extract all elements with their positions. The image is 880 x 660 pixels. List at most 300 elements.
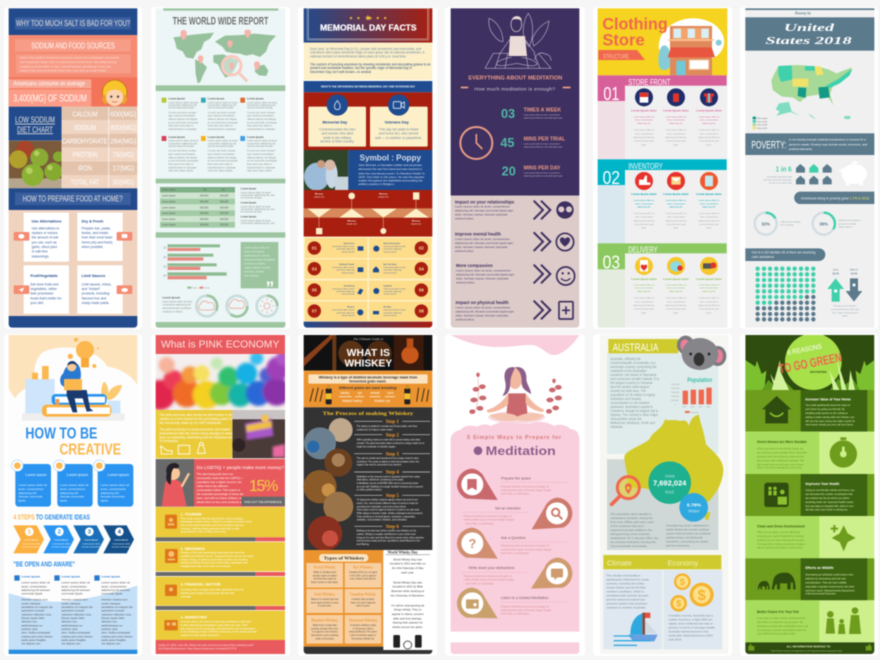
section: sodium and food sources: sodium than recommended before they ever pick up a salt shaker. <box>20 69 107 73</box>
delivery text: Lorem ipsum dolor sit <box>634 297 655 300</box>
panel: how to be creative <box>9 335 137 654</box>
grid: eight facts: 05 <box>312 288 317 293</box>
types of whiskey: contains at least 51% corn. <box>311 627 339 630</box>
data table: Lorem Ipsum <box>162 200 176 203</box>
grid: eight facts: Submit Information <box>383 242 400 245</box>
section: weddings: Another of the pink-generating industries has been the <box>181 551 245 555</box>
columns of text: amet, consectetuer <box>101 584 127 588</box>
section: financial sector <box>156 577 285 606</box>
world whisky day card: the third Saturday of May <box>392 566 424 570</box>
section: symbol poppy <box>348 150 432 190</box>
grid: eight facts: Respect <box>347 306 355 309</box>
section: food preparation tips: garlic, citrus juice <box>32 245 57 249</box>
inventory text: adipiscing elit. Aenean <box>698 219 721 222</box>
timeline: Memory <box>379 193 388 195</box>
grid: eight facts: consectetur adipiscing <box>336 311 354 314</box>
panel: clothing store <box>598 8 727 328</box>
section: symbol poppy: witnessed the war first hand and was inspired to <box>358 167 422 171</box>
arrows: up and down stats: Poverty rate for females <box>834 305 856 308</box>
inventory text: amet, consectetuer <box>635 202 653 205</box>
section: food preparation tips: vegetables, rather <box>30 287 58 291</box>
section 2 <box>745 432 874 474</box>
header: ★★ ★★★ <box>349 16 388 21</box>
world whisky day card: founded in 2012 and falls on <box>390 562 426 566</box>
section: tourism <box>156 507 285 537</box>
delivery text: adipiscing elit. Aenean <box>665 304 688 307</box>
data table: 000,000 <box>220 196 229 198</box>
intro text: country by total area. The <box>610 389 646 393</box>
top strip: Poverty In <box>795 12 811 16</box>
icon: child face <box>102 80 127 106</box>
data table: Lorem Ipsum <box>162 224 176 227</box>
store front text <box>631 108 723 146</box>
arrows: four steps: Lorem Ipsum <box>115 540 128 542</box>
impact items text: adipiscing elit. Aenean commodo ligula eget <box>456 272 514 276</box>
grid: eight facts: consectetur adipiscing <box>383 290 401 293</box>
six text items: consectetur adipiscing elit <box>247 142 276 145</box>
columns of text: nascetur ridiculus mus. <box>101 612 132 616</box>
delivery text: Lorem ipsum dolor sit <box>666 297 687 300</box>
table notes: consectetur adipiscing elit, sed <box>241 194 275 197</box>
table: diet chart: 75(MG) <box>112 150 135 159</box>
table notes: Lorem Ipsum <box>241 215 257 218</box>
columns of text: sem. Nulla consequat <box>61 631 90 635</box>
section 5: especially in aquatic environments and more <box>805 585 855 588</box>
steps: combined. The yeast is added to start fermentation when the <box>357 460 420 463</box>
section: food preparation tips: beans, and meats <box>82 231 108 235</box>
quote box <box>241 242 278 297</box>
intro text: December Day, isn't well known—is unclear. <box>310 70 372 74</box>
types of whiskey: Irish Whiskey <box>314 592 335 596</box>
climate box: correlated with periodic drought, <box>606 593 649 597</box>
world whisky day card <box>383 550 432 650</box>
section 2: also means that you will save more money <box>757 463 805 466</box>
columns of text: commodo ligula <box>101 592 123 596</box>
icons: delivery <box>635 257 718 275</box>
six text items: reprehenderit in voluptate <box>208 128 236 131</box>
section 1: your home by going eco-friendly. By <box>805 408 846 411</box>
orange intro: Different grains are used including: <box>339 386 397 390</box>
table: diet chart: PROTEIN <box>73 150 97 159</box>
types of whiskey <box>304 550 383 647</box>
header jungle <box>745 333 874 390</box>
table notes <box>241 187 275 225</box>
timeline: Memory <box>348 221 357 223</box>
yellow intro section: The pink economy is a socio-economic and market <box>159 428 231 432</box>
columns of text: pellentesque eu <box>61 623 83 627</box>
climate box: The climate of Australia is <box>606 573 641 577</box>
inventory text: Lorem ipsum dolor sit <box>699 212 720 215</box>
donut labels: 32% <box>761 221 770 226</box>
impact items text: Impact on your relationships <box>455 200 515 205</box>
stats: MINS PER TRIAL <box>524 136 565 142</box>
grid: eight facts: Lorem ipsum dolor sit amet <box>383 245 406 248</box>
orange intro <box>304 371 432 407</box>
top strip <box>745 8 874 16</box>
inventory text: dolor. <box>706 227 712 230</box>
arrows: four steps: sit amet consectetur <box>22 545 41 548</box>
columns of text: vel aliquet nec. <box>21 642 41 646</box>
stats <box>500 107 565 178</box>
arrows: four steps: Lorem ipsum dolor <box>52 542 71 545</box>
section: symbol poppy: 1915. One letter to the poem. He saw the poppies <box>358 175 425 179</box>
red question block: FIND OUT THE DIFFERENCE <box>244 500 282 504</box>
six text items: Lorem ipsum dolor sit amet <box>247 101 277 104</box>
economy box: world after Switzerland from 2013 <box>668 634 713 638</box>
quote box: adipiscing elit, sed do <box>244 253 270 257</box>
grid: eight facts: Hot Page <box>383 306 391 309</box>
arrows: four steps: 1 <box>28 530 31 536</box>
title: AUSTRALIA <box>613 342 659 354</box>
map legend: 16% or higher <box>757 118 768 120</box>
meditation steps text: Listen to a Guided Meditation <box>501 596 549 600</box>
timeline: simple text <box>347 223 357 226</box>
store front text: Lorem ipsum dolor sit <box>634 115 655 118</box>
figure body <box>509 16 527 56</box>
section 5: of Environmental Protection. <box>805 593 837 596</box>
impact items text: adipiscing elit. Aenean commodo ligula eget <box>456 309 514 313</box>
population chart: 5,000,000 <box>671 400 678 402</box>
economy box <box>663 570 722 649</box>
columns of text: ultricies nec <box>61 620 78 624</box>
impact items text: Lorem ipsum dolor sit amet, consectetuer <box>455 204 510 208</box>
world whisky day card: talks and host tastings, <box>393 616 422 620</box>
quote box: quis nostrud. <box>244 273 259 277</box>
steps: to refine purified mixture. <box>357 489 383 492</box>
world whisky day card: the University of Aberdeen. <box>391 593 425 597</box>
six text items: consectetur adipiscing elit <box>247 104 276 107</box>
background <box>156 8 285 328</box>
section 01: store front: STORE FRONT <box>628 77 671 87</box>
columns of text: ultricies nec <box>21 620 38 624</box>
header: MEMORIAL DAY FACTS <box>320 23 417 33</box>
cards: three tips: Lorem ipsum dolor sit <box>101 483 129 487</box>
store front text: commodo ligula eget <box>666 140 686 143</box>
types of whiskey: new, charred oak barrels. <box>350 578 376 581</box>
header: WHISKEY <box>344 359 393 370</box>
six text items: Lorem ipsum dolor sit amet <box>168 140 199 143</box>
inventory text: adipiscing elit. <box>637 206 651 209</box>
impact items text: dolor. Aenean massa. Aenean vulputate <box>456 276 509 280</box>
columns of text: amet, consectetuer <box>61 584 87 588</box>
red question block: the important percentage of those dis <box>197 492 244 496</box>
table notes: Lorem ipsum dolor sit amet <box>241 205 271 208</box>
delivery text: Lorem ipsum dolor sit <box>634 283 655 286</box>
header: why too much salt <box>9 8 137 35</box>
six text items: Duis aute irure dolor in <box>247 125 273 128</box>
six text items: Lorem ipsum dolor sit amet <box>168 101 199 104</box>
columns of text: Donec quam felis <box>21 616 45 620</box>
title: Store <box>602 30 645 49</box>
panel: prepare for meditation <box>451 335 579 654</box>
divider band <box>156 85 285 91</box>
title bar <box>156 335 285 354</box>
cards: three tips: Lorem Ipsum <box>108 473 129 477</box>
illustration: books <box>42 394 111 417</box>
section: marketing: support for their public statement. <box>181 633 220 637</box>
top wave <box>451 335 579 355</box>
section: weddings: wedding and fashion sector. Legal protection across the world <box>181 554 254 558</box>
delivery text: Lorem Ipsum dolor <box>696 277 723 281</box>
section 1: Increase Value of Your Home <box>805 398 851 402</box>
climate box: cyclones in northern Australia. <box>606 605 646 609</box>
climate box: and the seasonal tropical low- <box>606 597 646 601</box>
section 3: breathing better air. Improved health means <box>805 501 854 504</box>
columns of text: pede justo fringilla <box>61 638 86 642</box>
store front text: Lorem Ipsum dolor <box>663 108 690 112</box>
columns of text: pellentesque eu <box>21 623 43 627</box>
inventory text: dolor. <box>673 227 679 230</box>
section: weddings: made a range of options accessible to same-sex couples, <box>181 557 249 561</box>
meditation steps text: Praesent tincidunt sit amet leo at feugiat. Ut <box>464 515 512 518</box>
donut labels: poverty are mostly <box>838 222 857 225</box>
six text items: Ut enim ad minim veniam <box>208 111 236 114</box>
columns of text: ultricies nec <box>101 620 118 624</box>
steps: The wort is cooled and transferred into a large vessel is also <box>357 457 419 460</box>
delivery text: adipiscing elit. <box>637 290 651 293</box>
title: CREATIVE <box>59 442 121 459</box>
grid: eight facts: 08 <box>419 309 424 314</box>
table notes: Lorem ipsum dolor sit amet <box>241 191 271 194</box>
delivery text: amet, consectetuer <box>667 300 685 303</box>
cards: three tips: Lorem ipsum dolor sit <box>60 483 89 487</box>
economy box: capita, and a relatively low rate of <box>668 622 713 626</box>
section: marketing: in their advertising campaigns using same-sex ads. Their <box>181 623 248 627</box>
steps: being as it's color and then filtered to remove them often particles <box>357 536 425 539</box>
impact items text: dolor. Aenean massa. Aenean vulputate <box>455 245 508 249</box>
panel: go green <box>745 333 874 654</box>
illustration: desk items <box>22 366 124 421</box>
store front text: dolor. <box>673 143 679 146</box>
arrows: up and down stats: down to <box>850 268 859 271</box>
table notes: consectetur adipiscing elit, sed <box>241 208 275 211</box>
steps: spending the maturation, and some times blend. <box>357 505 407 508</box>
meditation steps text: mattis porttitor quam vel luctus integer feugiat <box>501 489 551 492</box>
subheading: How much meditation is enough? <box>474 86 555 92</box>
six text items: Ut enim ad minim veniam <box>168 150 196 153</box>
section 4: way for greener and cleaner environment. <box>757 546 803 549</box>
section 2: items longer than traditional materials. This <box>757 459 805 462</box>
inventory text: adipiscing elit. <box>669 206 683 209</box>
intro text: concentrated on the eastern <box>610 401 650 405</box>
section: food preparation tips: seasonings. <box>32 254 50 258</box>
types of whiskey: least 3 years. <box>356 605 370 608</box>
lower text: self-governing crown colonies <box>610 532 650 536</box>
six text items: consectetur adipiscing elit <box>208 142 236 145</box>
grid: eight facts: Lorem ipsum dolor sit amet <box>332 287 355 290</box>
data table: 000,000 <box>200 196 209 198</box>
arrows: up and down stats: increased between 2010 and <box>831 308 860 311</box>
section: symbol poppy: John McCrae, a Canadian soldier and physician, <box>358 163 423 167</box>
impact items text: Lorem ipsum dolor sit amet, consectetuer <box>456 305 510 309</box>
grid: eight facts: consectetur adipiscing <box>383 248 401 251</box>
process photos <box>303 418 353 551</box>
grid: eight facts: sed do eiusmod <box>341 272 354 274</box>
photo: rainbow smoke <box>154 353 286 411</box>
bar chart: Q4 <box>163 276 167 278</box>
meditation steps text: lorem felis, ut scelerisque. <box>501 613 530 616</box>
intro text: Each year, on Memorial Day (U.S.), people visit cemeteries and memorials, and <box>310 47 421 51</box>
section: symbol poppy: write the now-famous poem "In Flanders Fields" in <box>358 171 425 175</box>
columns of text: pretium quis <box>61 627 78 631</box>
lower section <box>451 196 579 328</box>
upper info box <box>607 353 718 454</box>
donut text: eiusmod tempor incididunt <box>162 307 192 310</box>
pin 2: set an intention <box>532 498 572 529</box>
dark process section <box>304 407 432 550</box>
arrows: four steps: sit amet consectetur <box>52 545 71 548</box>
delivery text: amet, consectetuer <box>700 287 718 290</box>
section 5: Efforts on Wildlife <box>805 566 834 570</box>
section: weddings: 2. WEDDINGS <box>181 547 205 551</box>
table: diet chart: IRON <box>78 164 92 173</box>
table: diet chart: CARBOHYDRATE <box>62 136 107 145</box>
arrows: four steps: 2 <box>58 530 61 536</box>
six text items: Lorem Ipsum <box>168 135 186 139</box>
section: food preparation tips: Use alternatives to <box>32 226 59 230</box>
red question block: allows them to buy more products and <box>197 500 245 504</box>
grid: eight facts: consectetur adipiscing <box>383 311 401 314</box>
six text items: consectetur adipiscing elit <box>168 104 197 107</box>
store front text: amet, consectetuer <box>635 132 653 135</box>
cards: three tips: Aenean commodo <box>18 495 43 499</box>
heading <box>467 435 562 458</box>
grid: eight facts: consectetur adipiscing <box>336 248 354 251</box>
grid: eight facts: Anchor Item <box>344 242 355 245</box>
stats: Lorem ipsum dolor sit amet, consectetuer <box>524 114 560 117</box>
population chart: 20,000,000 <box>671 388 679 390</box>
six text items: Lorem Ipsum <box>208 97 225 101</box>
cards: three tips: amet, consectetuer <box>101 487 126 491</box>
six text items: sed do eiusmod tempor <box>168 145 194 148</box>
meditation steps text: lorem felis, ut scelerisque. <box>466 522 495 525</box>
data table: Lorem Ipsum <box>162 206 176 209</box>
section 2: when it comes to maintaining your home. <box>757 467 802 470</box>
section: food preparation tips: than processed <box>30 292 53 296</box>
data table: 000,000 <box>200 201 209 203</box>
types of whiskey: Contains 51% rye, an aged <box>349 571 378 574</box>
section 6: If you want to make a better environment for <box>757 617 806 620</box>
red question block: population has a higher income, but <box>197 480 242 484</box>
intro text: and numerous smaller islands. It is <box>610 377 659 381</box>
orange intro: Malted barley <box>342 399 363 403</box>
stats: 03 <box>501 107 515 121</box>
world whisky day card: each year. <box>401 570 414 574</box>
header: The Ultimate Guide to <box>353 337 384 341</box>
stat: 3,400 mg of sodium <box>9 77 137 107</box>
orange intro: fermented grain mash. <box>349 379 387 383</box>
six text items: ullamco laboris nisi aliquip <box>208 156 237 159</box>
stat: 1 in 6 <box>763 165 792 184</box>
icon: piggy bank <box>838 161 867 185</box>
columns of text: parturient montes <box>21 609 45 613</box>
data table: 000,000 <box>220 213 229 215</box>
grid: eight facts: consectetur adipiscing <box>383 269 401 272</box>
pin 3: ask a question: ? <box>468 537 476 551</box>
six text items: sed do eiusmod tempor <box>208 107 234 110</box>
quote box: eiusmod tempor incididunt <box>244 257 275 261</box>
six text items: ex ea commodo consequat <box>247 121 277 124</box>
lower text: established. On 1 January 1901, the <box>610 536 659 540</box>
inventory text <box>631 192 723 230</box>
cards: three tips: Lorem Ipsum <box>67 473 88 477</box>
types of whiskey: least 3 years in oak casks. <box>311 581 339 584</box>
tasmania <box>704 512 710 520</box>
title banner: United <box>784 22 835 34</box>
six text items: reprehenderit in voluptate <box>208 166 236 169</box>
cards: three tips: adipiscing elit. <box>101 491 120 495</box>
section: tourism: advantage of pink money: Only for a couple of months, there <box>181 520 252 524</box>
steps: market. Whisky is usually cold-filtered in your, before and <box>357 533 416 536</box>
map: united states <box>771 65 852 105</box>
grid: eight facts: 03 <box>312 266 317 271</box>
columns of text: Aenean massa cum <box>61 598 88 602</box>
data table: 000,000 <box>200 225 209 227</box>
section: food preparation tips: foods that's better for <box>30 296 62 300</box>
donut text <box>162 295 193 313</box>
six text items: Ut enim ad minim veniam <box>208 150 236 153</box>
callout pill: Out of a 100 families 48 of them are receiving <box>752 250 816 254</box>
columns of text: nascetur ridiculus mus. <box>21 612 52 616</box>
impact items text <box>455 200 515 321</box>
grid: eight facts: 02 <box>419 246 424 251</box>
cards: three tips: adipiscing elit. <box>60 491 79 495</box>
intro text: Commonwealth of Australia, is a <box>610 361 656 365</box>
section 3: less spending on hospital bills, which in turn <box>805 505 854 508</box>
table notes: do eiusmod tempor <box>241 211 262 214</box>
section 01: store front: 01 <box>603 83 619 104</box>
section: food preparation tips: Prepare rice, pasta, <box>82 226 111 230</box>
types of whiskey: Made from a mash that <box>313 624 337 627</box>
delivery text: adipiscing elit. <box>702 290 716 293</box>
steps: oxidation, concentration, filtration, and coloration. <box>357 519 408 522</box>
impact items text: Lorem ipsum dolor sit amet, consectetuer <box>455 237 510 241</box>
donut labels: single mothers. <box>838 226 853 229</box>
intro text: sovereign country comprising the <box>610 365 657 369</box>
pictogram: dots <box>755 266 815 321</box>
lower text: time of an 1850s gold rush, most <box>610 520 654 524</box>
columns of text: parturient montes <box>61 609 85 613</box>
arrows: up and down stats: 16.1% <box>832 273 840 275</box>
types of whiskey: in wood pots. <box>318 605 332 608</box>
steps: and becomes ready and into. specified to avoid filtered to one <box>357 540 421 543</box>
footer: https://www.conserve-energy-future.com/ 6-good-reasons-to-go-green.php <box>771 650 843 653</box>
purple background <box>451 8 579 196</box>
inventory text: commodo ligula eget <box>634 223 654 226</box>
arrows: four steps: Lorem ipsum dolor <box>22 542 41 545</box>
delivery text: commodo ligula eget <box>634 308 654 311</box>
banner: poverty definition: POVERTY: <box>751 140 786 152</box>
cards: three tips: Lorem Ipsum <box>25 473 47 477</box>
data table: 000,000 <box>220 207 229 209</box>
inventory text: Lorem ipsum dolor sit <box>634 199 655 202</box>
panel: low sodium diet chart title: LOW SODIUM <box>15 116 55 125</box>
grid: eight facts: Lorem ipsum dolor sit amet <box>383 287 406 290</box>
inventory text: Lorem ipsum dolor sit <box>634 212 655 215</box>
types of whiskey: in Tennessee that is <box>353 627 374 630</box>
intro text: Australia, officially the <box>610 357 641 361</box>
panel: poverty in united states <box>745 8 874 328</box>
population chart: 2015 <box>683 406 686 408</box>
inventory text: adipiscing elit. Aenean <box>665 219 688 222</box>
columns of text: nascetur ridiculus mus. <box>61 612 92 616</box>
data table: Q2 <box>222 190 225 192</box>
stat: 1 in 6: 1 in 6 <box>776 165 792 174</box>
timeline: simple text <box>411 223 422 226</box>
section 1: will not only save money but make a point for <box>805 420 855 423</box>
donut labels: 36% <box>819 221 828 226</box>
world whisky day card: World Whisky Day was <box>393 580 423 584</box>
